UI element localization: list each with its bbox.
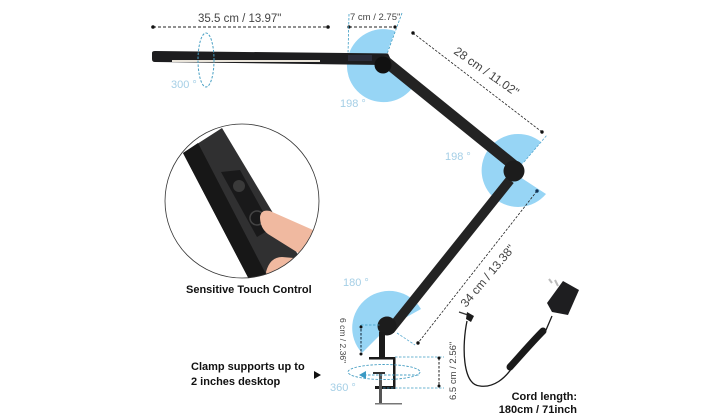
touch control detail circle [165,124,322,285]
rotation sector: head hinge 198 degrees [347,29,413,102]
dimension: head length [151,13,330,29]
dimension: clamp opening: 6.5 cm / 2.56" [448,342,459,400]
arrow to clamp [314,371,321,379]
caption: clamp: Clamp supports up to [191,361,305,373]
rotation ellipse: 300 degrees: 300 ° [171,79,197,91]
dimension: lower arm: 34 cm / 13.38" [458,242,518,310]
infographic: lamp dimensions [151,12,579,413]
rotation ellipse: 300 degrees [171,33,214,91]
dimension: 7 cm [347,12,402,54]
dimension: upper arm [411,31,544,134]
dimension: clamp opening [383,342,459,400]
dimension: upper arm: 28 cm / 11.02" [451,44,522,99]
dimension: lower arm [397,135,547,345]
dimension: head length: 35.5 cm / 13.97" [198,13,281,25]
caption: clamp: 2 inches desktop [191,376,281,388]
label: 198 degrees head: 198 ° [340,98,366,110]
caption: cord length: Cord length: [512,391,577,403]
lower arm [390,180,510,330]
caption: cord length [499,391,577,416]
label: 180 degrees: 180 ° [343,277,369,289]
hinge: base [378,316,396,336]
rotation sector: base hinge 180 degrees [352,291,421,353]
desk clamp [369,332,402,404]
hinge: head [374,56,392,74]
dimension: 7 cm: 7 cm / 2.75" [350,12,400,23]
upper arm [385,61,514,166]
hinge: elbow [504,160,524,182]
lamp head bar [152,51,392,65]
label: 198 degrees elbow: 198 ° [445,151,471,163]
caption: touch control: Sensitive Touch Control [186,284,312,296]
dimension: 6 cm [338,318,380,363]
caption: cord length: 180cm / 71inch [499,404,577,416]
caption: clamp [191,361,305,388]
rotation ellipse: 360 degrees [330,364,420,394]
power cord and adapter [459,279,579,386]
rotation ellipse: 360 degrees: 360 ° [330,382,356,394]
dimension: 6 cm: 6 cm / 2.36" [338,318,348,363]
rotation sector: elbow hinge 198 degrees [482,134,546,207]
